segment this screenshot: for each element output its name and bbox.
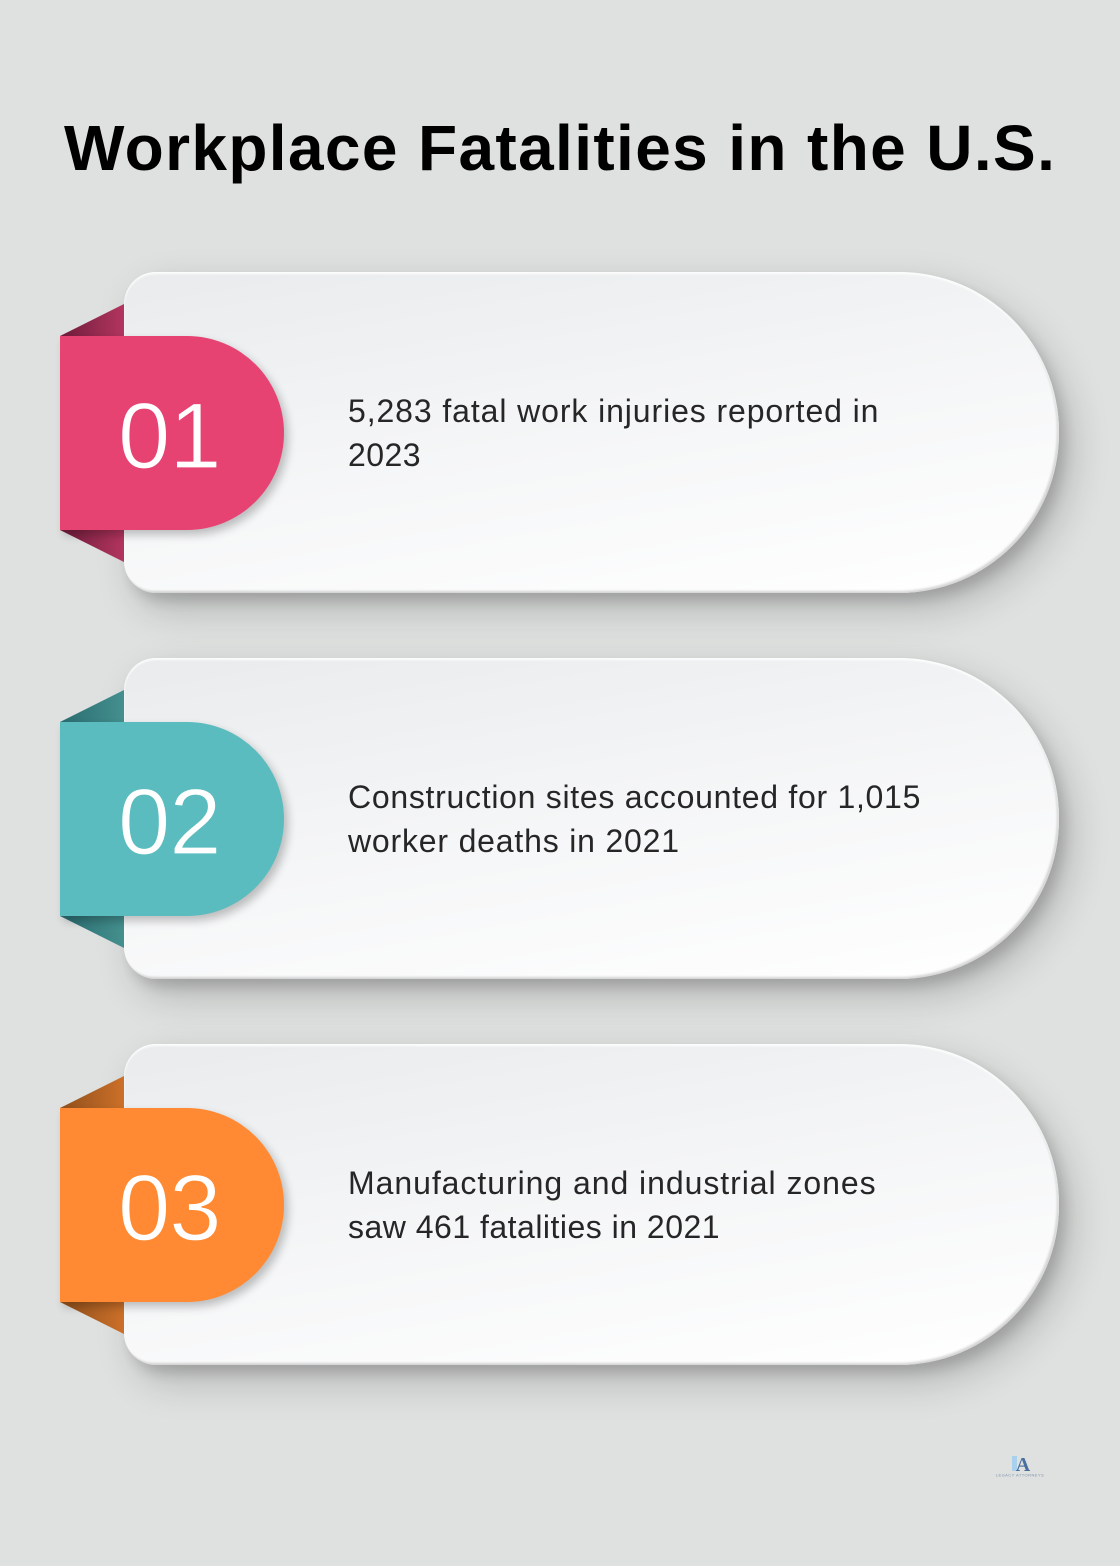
panel: item 01 xyxy=(60,269,1086,626)
text: stat 01: 5,283 fatal work injuries reported in xyxy=(348,393,879,429)
text: stat 03: saw 461 fatalities in 2021 xyxy=(348,1209,720,1245)
text: stat 03: Manufacturing and industrial zones xyxy=(348,1165,877,1201)
number tab 03: 03 xyxy=(118,1155,221,1260)
panel: item 03 xyxy=(60,1041,1086,1398)
panel: item 02 xyxy=(60,655,1086,1012)
icon: logo: LEGACY ATTORNEYS xyxy=(996,1472,1044,1478)
ribbon folds 03 xyxy=(60,1076,124,1334)
text: stat 02: worker deaths in 2021 xyxy=(348,823,680,859)
text: stat 01: 2023 xyxy=(348,437,421,473)
ribbon folds 01 xyxy=(60,304,124,562)
number tab 03 xyxy=(60,1108,284,1302)
icon: logo xyxy=(996,1454,1044,1478)
number tab 02 xyxy=(60,722,284,916)
icon: logo: A xyxy=(1016,1454,1031,1476)
card background 01 xyxy=(124,272,1059,593)
text: stat 02 xyxy=(348,779,921,859)
ribbon folds 02 xyxy=(60,690,124,948)
number tab 01: 01 xyxy=(118,383,221,488)
title: Workplace Fatalities in the U.S. xyxy=(64,112,1056,184)
number tab 01 xyxy=(60,336,284,530)
text: stat 03 xyxy=(348,1165,877,1245)
text: stat 01 xyxy=(348,393,879,473)
text: stat 02: Construction sites accounted for 1,015 xyxy=(348,779,921,815)
number tab 02: 02 xyxy=(118,769,221,874)
card background 02 xyxy=(124,658,1059,979)
card background 03 xyxy=(124,1044,1059,1365)
